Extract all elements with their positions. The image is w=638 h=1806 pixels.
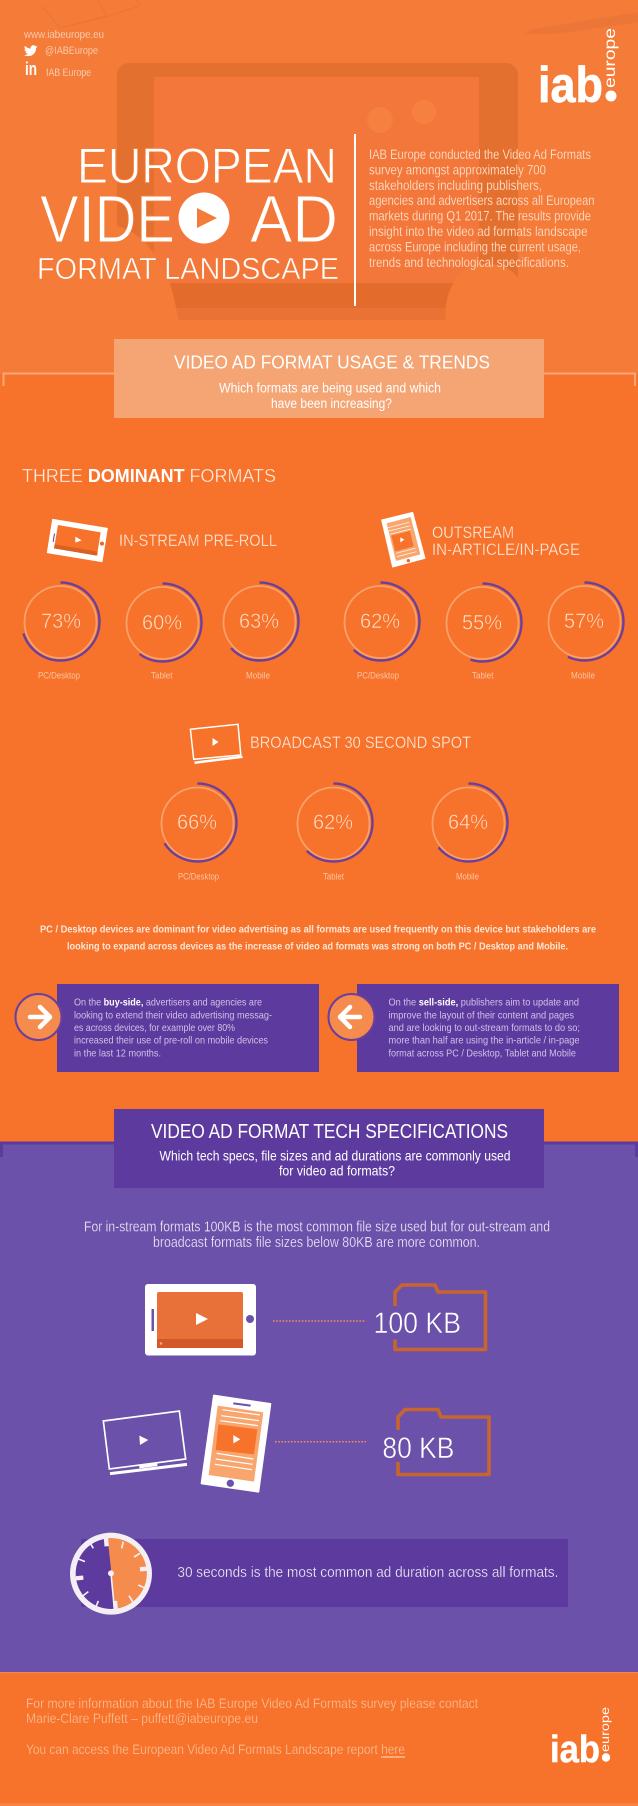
twitter handle: @IABEurope — [45, 45, 98, 57]
chart: in-stream Mobile: 63% — [239, 610, 279, 633]
intro text block: markets during Q1 2017. The results provide — [369, 209, 591, 224]
label: 80 KB: 80 KB — [382, 1432, 454, 1465]
chart: in-stream PC/Desktop: PC/Desktop — [38, 670, 80, 682]
panel: usage and trends banner — [114, 339, 544, 418]
icon: play circle — [178, 192, 230, 244]
chart: in-stream Tablet: Tablet — [151, 670, 173, 682]
panel: duration bar — [81, 1539, 568, 1607]
panel: tech specifications banner: for video ad formats? — [279, 1162, 395, 1178]
logo: iab europe footer: iab — [550, 1729, 600, 1771]
panel: buy-side: in the last 12 months. — [74, 1048, 161, 1060]
intro text block: agencies and advertisers across all European — [369, 193, 594, 208]
title: FORMAT LANDSCAPE — [37, 251, 339, 286]
bold summary text — [40, 924, 596, 952]
chart: in-stream PC/Desktop — [22, 582, 100, 682]
title — [37, 138, 339, 286]
chart: broadcast PC/Desktop — [158, 784, 236, 882]
logo: iab europe footer: europe — [598, 1707, 612, 1752]
bold summary text: looking to expand across devices as the increase of video ad formats was strong on both PC / Desktop and Mobile. — [67, 940, 568, 952]
title: VIDE — [40, 182, 175, 257]
icon: right arrow — [16, 994, 62, 1040]
icon: phone — [382, 512, 425, 567]
chart: in-stream Tablet: 60% — [142, 612, 182, 634]
panel: tech specifications banner: Which tech specs, file sizes and ad durations are commonly used — [160, 1148, 510, 1164]
panel: buy-side: increased their use of pre-roll on mobile devices — [74, 1034, 268, 1046]
intro text block — [369, 147, 594, 270]
chart: broadcast PC/Desktop: PC/Desktop — [178, 872, 219, 882]
panel: tech specifications banner — [114, 1109, 544, 1188]
chart: outstream Tablet: 55% — [462, 612, 502, 634]
label: outstream in-article — [432, 524, 580, 559]
label: outstream in-article: IN-ARTICLE/IN-PAGE — [432, 541, 580, 559]
icon: twitter — [24, 45, 37, 56]
footer contact text: Marie-Clare Puffett – puffett@iabeurope.eu — [26, 1710, 258, 1726]
intro text block: insight into the video ad formats landscape — [369, 224, 588, 239]
panel: hero background photo — [0, 0, 638, 374]
chart: broadcast Tablet — [294, 784, 372, 882]
panel: buy-side: On the buy-side, advertisers and agencies are — [74, 996, 262, 1008]
chart: broadcast Mobile: Mobile — [456, 872, 479, 882]
chart: outstream Tablet — [444, 584, 522, 682]
dotted connector 80KB — [275, 1441, 366, 1443]
panel: sell-side: On the sell-side, publishers aim to update and — [388, 996, 579, 1008]
panel: sell-side: improve the layout of their content and pages — [388, 1010, 574, 1022]
icon: left arrow — [328, 994, 374, 1040]
panel: purple tech section background — [0, 1142, 638, 1672]
panel: buy-side — [16, 984, 319, 1072]
logo: iab europe footer — [550, 1707, 612, 1771]
chart: outstream PC/Desktop: PC/Desktop — [357, 670, 399, 682]
panel: sell-side: more than half are using the in-article / in-page — [388, 1034, 580, 1046]
text: file size summary: broadcast formats file sizes below 80KB are more common. — [153, 1235, 480, 1251]
linkedin name: IAB Europe — [46, 67, 91, 79]
text: file size summary: For in-stream formats 100KB is the most common file size used but for out-stream and — [84, 1220, 550, 1236]
intro text block: stakeholders including publishers, — [369, 178, 542, 193]
chart: in-stream Mobile: Mobile — [246, 670, 270, 682]
chart: broadcast Mobile: 64% — [448, 811, 488, 834]
panel: buy-side: es across devices, for example over 80% — [74, 1022, 235, 1034]
chart: broadcast Mobile — [430, 784, 508, 882]
panel: duration bar: 30 seconds is the most common ad duration across all formats. — [177, 1564, 558, 1581]
text: file size summary — [84, 1220, 550, 1251]
panel: sell-side — [328, 984, 619, 1072]
chart: outstream PC/Desktop — [342, 582, 420, 682]
intro text block: survey amongst approximately 700 — [369, 162, 546, 177]
chart: in-stream Tablet — [124, 584, 202, 682]
website link: www.iabeurope.eu — [23, 29, 104, 41]
chart: outstream Tablet: Tablet — [472, 670, 494, 682]
chart: in-stream PC/Desktop: 73% — [41, 610, 81, 633]
icon: tablet — [47, 519, 107, 562]
intro text block: IAB Europe conducted the Video Ad Formats — [369, 147, 591, 162]
icon: outlined laptop — [103, 1411, 187, 1474]
footer contact text: For more information about the IAB Europe Video Ad Formats survey please contact — [26, 1695, 478, 1711]
title: AD — [250, 182, 338, 257]
intro text block: across Europe including the current usage, — [369, 240, 581, 255]
chart: in-stream Mobile — [220, 582, 298, 682]
chart: outstream Mobile: Mobile — [571, 670, 595, 682]
footer contact text: You can access the European Video Ad Formats Landscape report here — [26, 1741, 405, 1757]
label: in-stream pre-roll: IN-STREAM PRE-ROLL — [119, 532, 277, 550]
heading: three dominant formats: THREE DOMINANT FORMATS — [22, 465, 276, 486]
icon: folder 80 KB — [398, 1410, 489, 1474]
label: broadcast: BROADCAST 30 SECOND SPOT — [250, 734, 471, 752]
link underline — [381, 1756, 405, 1758]
chart: broadcast Tablet: Tablet — [323, 872, 344, 882]
icon: clock — [70, 1533, 152, 1615]
panel: tech specifications banner: VIDEO AD FORMAT TECH SPECIFICATIONS — [151, 1121, 508, 1143]
panel: usage and trends banner: VIDEO AD FORMAT USAGE & TRENDS — [174, 352, 490, 372]
chart: broadcast PC/Desktop: 66% — [177, 811, 217, 834]
section divider — [4, 374, 635, 386]
icon: folder 100 KB — [395, 1285, 486, 1350]
dotted connector 100KB — [273, 1320, 366, 1322]
chart: outstream Mobile: 57% — [564, 610, 604, 633]
icon: laptop — [190, 724, 242, 763]
panel: usage and trends banner: Which formats are being used and which — [219, 380, 441, 396]
label: outstream in-article: OUTSREAM — [432, 524, 514, 542]
logo: iab europe: europe — [602, 28, 619, 88]
chart: broadcast Tablet: 62% — [313, 811, 353, 834]
title: EUROPEAN — [77, 138, 337, 194]
icon: phone large — [202, 1396, 270, 1492]
panel: sell-side: format across PC / Desktop, Tablet and Mobile — [388, 1048, 576, 1060]
label: 100 KB: 100 KB — [374, 1307, 461, 1340]
logo: iab europe: iab — [538, 57, 603, 113]
panel: sell-side: and are looking to out-stream formats to do so; — [388, 1022, 580, 1034]
panel: usage and trends banner: have been increasing? — [271, 396, 392, 411]
icon: large tablet — [145, 1284, 256, 1356]
chart: outstream Mobile — [546, 582, 624, 682]
footer contact text — [26, 1695, 478, 1757]
panel: footer — [0, 1672, 638, 1806]
icon: linkedin: in — [25, 59, 37, 79]
panel: buy-side: looking to extend their video advertising messag- — [74, 1010, 272, 1022]
logo: iab europe — [538, 28, 619, 113]
intro text block: trends and technological specifications. — [369, 255, 569, 270]
chart: outstream PC/Desktop: 62% — [360, 610, 400, 633]
divider line — [354, 134, 356, 306]
